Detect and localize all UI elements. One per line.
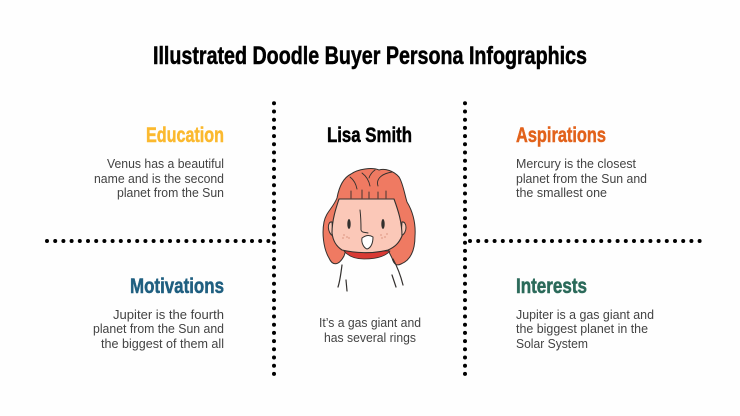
panel: motivations [93, 275, 224, 351]
dotted divider: right vertical [463, 103, 467, 381]
heading: interests: Interests [516, 275, 587, 298]
mouth [362, 236, 373, 249]
heading: motivations: Motivations [130, 275, 224, 298]
persona caption: has several rings [324, 331, 416, 345]
panel: education [94, 124, 224, 200]
sweater lines [338, 259, 403, 291]
nose [360, 210, 368, 233]
dotted divider: left horizontal [47, 239, 270, 243]
text: motivations: planet from the Sun and [93, 322, 224, 336]
text: interests: Jupiter is a gas giant and [516, 308, 654, 322]
hair [323, 169, 415, 265]
text: aspirations: planet from the Sun and [516, 172, 647, 186]
eyes [347, 219, 351, 229]
text: aspirations: Mercury is the closest [516, 157, 637, 171]
hair strands [350, 170, 392, 198]
dotted divider: right horizontal [470, 239, 701, 243]
persona caption: It’s a gas giant and [319, 316, 421, 330]
text: motivations: the biggest of them all [101, 337, 224, 351]
persona name: Lisa Smith [327, 124, 412, 147]
heading: education: Education [146, 124, 224, 147]
icon: persona portrait [323, 169, 415, 291]
text: interests: Solar System [516, 337, 588, 351]
text: interests: the biggest planet in the [516, 322, 648, 336]
text: education: planet from the Sun [117, 186, 224, 200]
freckles [342, 233, 388, 239]
dotted divider: left vertical [272, 103, 276, 381]
face [332, 199, 402, 253]
text: education: Venus has a beautiful [107, 157, 224, 171]
panel: aspirations [516, 124, 647, 200]
scarf [344, 251, 390, 259]
title: Illustrated Doodle Buyer Persona Infographics [153, 42, 587, 70]
panel: persona [319, 124, 421, 345]
text: aspirations: the smallest one [516, 186, 607, 200]
text: education: name and is the second [94, 172, 224, 186]
ears [328, 222, 333, 236]
text: motivations: Jupiter is the fourth [113, 308, 224, 322]
panel: interests [516, 275, 654, 351]
heading: aspirations: Aspirations [516, 124, 606, 147]
